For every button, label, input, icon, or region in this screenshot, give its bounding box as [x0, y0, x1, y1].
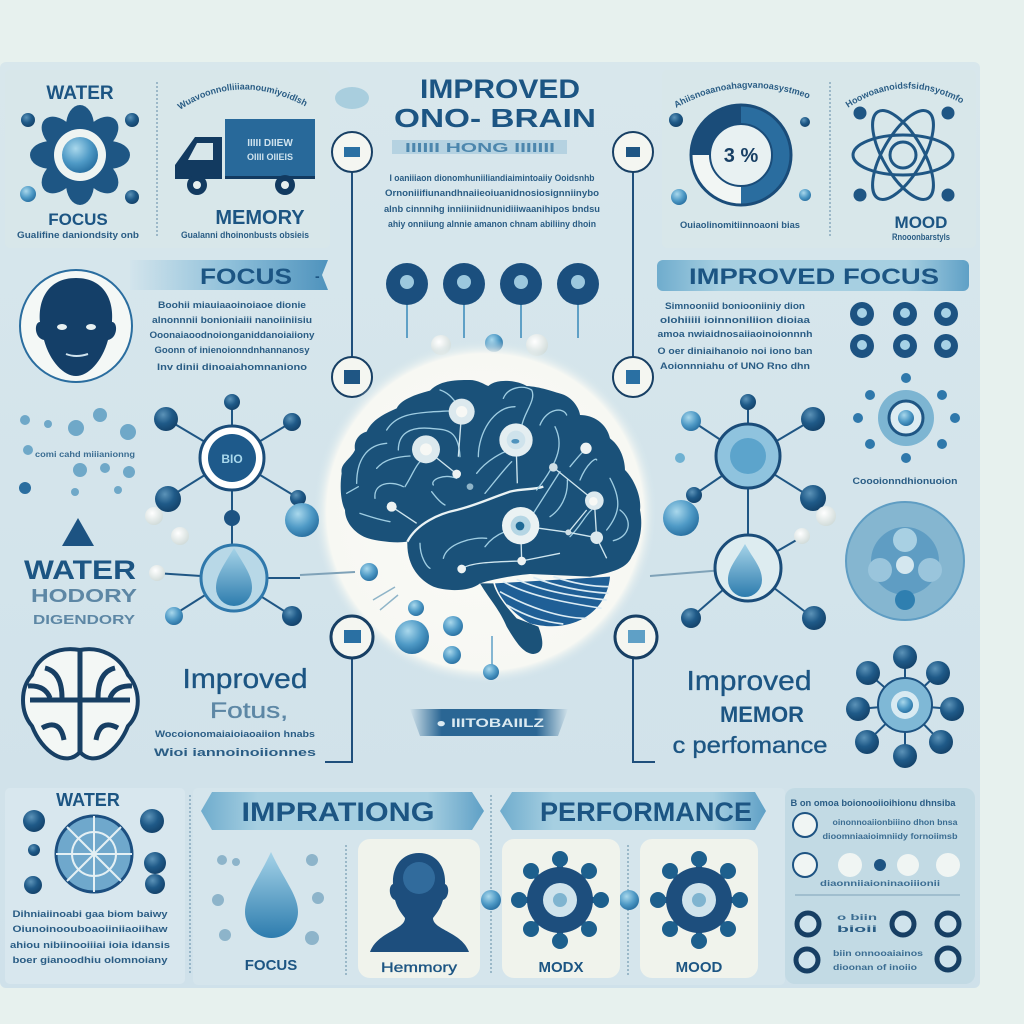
brain nodes [387, 399, 604, 573]
heading: water: WATER [46, 83, 114, 104]
text rows 2: biin onnooaiainos [833, 949, 924, 958]
improved focus paragraph: Aoionnniahu of UNO Rno dhn [660, 361, 810, 371]
donut caption: Ahiisnoaanoahagvanoasystmeo [675, 82, 810, 108]
right text: improved memory: c perfomance [672, 732, 828, 758]
node: top left [332, 132, 372, 172]
icon: truck [175, 119, 315, 195]
node: lower right [613, 357, 653, 397]
cerebrum [341, 380, 641, 590]
heading: focus band: FOCUS [200, 264, 292, 289]
donut chart [691, 105, 791, 205]
caption: B on omoa boionooiioihionu dhnsiba [790, 798, 957, 808]
panel: bottom right [785, 788, 975, 984]
truck caption: Wuavoonnolliiiaanoumiyoidlsh [176, 83, 307, 109]
card: head [358, 839, 480, 978]
icon: wheel [56, 816, 132, 892]
lower connectors [325, 616, 657, 762]
side dots [23, 809, 166, 894]
right text: improved memory: MEMOR [720, 702, 804, 727]
atom caption: Hoowoaanoidsfsidnsyotmfo [845, 82, 963, 108]
card: mood 1 [502, 839, 620, 978]
paragraph [10, 909, 170, 965]
brain [341, 380, 641, 654]
left text: improved focus [154, 663, 316, 759]
card: drop: FOCUS [245, 957, 297, 974]
icon: face portrait [20, 270, 132, 382]
caption: cell cluster: Coooionndhionuoion [852, 476, 958, 486]
focus paragraph: Inv dinii dinoaiahomnaniono [157, 362, 308, 372]
improved focus paragraph: amoa nwiaidnosaiiaoinoionnnh [658, 329, 812, 339]
icon: atom [853, 102, 953, 208]
title: IMPROVED [420, 74, 580, 104]
left network [145, 394, 378, 626]
brain node links [392, 412, 607, 569]
improved focus paragraph [658, 301, 812, 371]
intro paragraph: I oaniiiaon dionomhuniiliandiaimintoaiiy Ooidsnhb [390, 173, 595, 183]
center label [410, 709, 568, 736]
band: imprationg [201, 792, 484, 830]
focus paragraph [150, 300, 314, 372]
heading: water history [24, 555, 137, 627]
motion ticks [373, 587, 398, 610]
right network [650, 394, 836, 630]
left text: improved focus: Wioi iannoinoiionnes [154, 747, 316, 759]
node: hub top [200, 426, 264, 490]
heading: improved focus band: IMPROVED FOCUS [689, 264, 939, 289]
icon: hub network right [846, 645, 964, 768]
caption lines: Ouiaolinomitiinnoaoni bias [680, 220, 800, 230]
icon: triangle [62, 518, 94, 546]
connectors: vertical [352, 165, 633, 360]
card: mood 1: MODX [538, 959, 584, 976]
card: drop [212, 852, 324, 974]
lobe boundary [407, 487, 543, 542]
satellites [663, 394, 836, 630]
panel: bottom center [190, 788, 785, 985]
icon row 1 [793, 813, 960, 877]
heading: focus band [130, 260, 328, 290]
paragraph: boer gianoodhiu olomnoiany [12, 955, 168, 965]
icon row 2 [796, 913, 959, 971]
text rows 2: dioonan of inoiio [833, 963, 917, 972]
text rows: dioomniaaioimniidy fornoiimsb [822, 832, 958, 841]
grooves [347, 387, 628, 568]
left text: improved focus: Fotus, [210, 698, 288, 723]
band: performance [500, 792, 766, 830]
paragraph: ahiou nibiinooiiiai ioia idansis [10, 940, 170, 950]
focus paragraph: Ooonaiaoodnoionganiddanoiaiiony [150, 330, 314, 340]
card: mood 2: MOOD [676, 959, 722, 976]
small ornament [335, 87, 369, 109]
text rows: diaonniiaioninaoiiionii [820, 879, 940, 888]
improved focus paragraph: O oer diniaihanoio noi iono ban [658, 346, 812, 356]
band: performance: PERFORMANCE [540, 797, 752, 827]
heading: water history: HODORY [31, 586, 137, 606]
paragraph: Dihniaiinoabi gaa biom baiwy [12, 909, 168, 919]
satellites [145, 394, 378, 626]
text rows [820, 818, 958, 888]
node: water drop [201, 545, 267, 611]
memory caption: Gualanni dhoinonbusts obsieis [181, 230, 309, 240]
title [394, 74, 596, 133]
text rows 2: bioii [837, 924, 877, 934]
small dots [669, 113, 811, 205]
panel: top left [17, 82, 315, 240]
focus paragraph: Goonn of inienoionndnhannanosy [154, 345, 310, 355]
right text: improved memory [672, 665, 828, 758]
band: imprationg: IMPRATIONG [242, 797, 434, 827]
glow behind brain [313, 340, 657, 684]
heading: focus band: - [315, 268, 320, 284]
card: head: Hemmory [381, 959, 457, 975]
panel: top right [669, 82, 963, 242]
icon grid: right pins [850, 302, 958, 358]
label: memory: MEMORY [215, 207, 305, 229]
intro paragraph: alnb cinnnihg inniiiniidnunidiiiwaanihipos bndsu [384, 204, 600, 214]
title: ONO- BRAIN [394, 103, 596, 133]
heading: water history: WATER [24, 555, 136, 585]
icon: truck: IIIII DIIEW [247, 138, 293, 149]
left text: improved focus: Improved [182, 663, 308, 694]
panel: bottom left water [5, 788, 185, 984]
heading: water history: DIGENDORY [33, 612, 135, 627]
intro paragraph [384, 173, 600, 229]
title pill [392, 140, 567, 155]
node: drop right [715, 535, 781, 601]
intro paragraph: Ornoniiifiunandhnaiieoiuanidnosiosignniinybo [385, 188, 600, 198]
four pins [386, 263, 599, 338]
icon: cell cluster [853, 373, 960, 463]
left text: improved focus: Wocoionomaiaioiaoaiion hnabs [155, 729, 315, 739]
cerebellum [480, 577, 610, 654]
text rows 2: o biin [837, 913, 877, 922]
node: hub top: BIO [221, 452, 243, 466]
left small dots block [19, 408, 136, 496]
heading: WATER [56, 790, 120, 810]
improved focus paragraph: olohiiiii ioinnoniliion dioiaa [660, 315, 811, 325]
donut chart: 3 % [724, 145, 758, 167]
label: focus: FOCUS [48, 210, 108, 229]
improved focus paragraph: Simnooniid boniooniiniy dion [665, 301, 805, 311]
bubbles below brain [395, 600, 499, 680]
connector dots [481, 890, 639, 910]
node: hub right [716, 424, 780, 488]
icon: brain outline [23, 649, 138, 758]
focus paragraph: alnonnnii bonioniaiii nanoiiniisiu [152, 315, 312, 325]
paragraph: Oiunoinoouboaoiiniiaoiihaw [12, 924, 169, 934]
icon: focus flower [20, 105, 139, 205]
title pill: IIIIII HONG IIIIIII [405, 140, 555, 155]
node: lower left [332, 357, 372, 397]
left small dots block: comi cahd miiianionng [35, 450, 135, 459]
label: mood: MOOD [895, 213, 947, 232]
intro paragraph: ahiy onniiung alnnie amanon chnam abiliiny dhoin [388, 219, 596, 229]
focus paragraph: Boohii miauiaaoinoiaoe dionie [158, 300, 306, 310]
text rows 2 [833, 913, 924, 972]
text rows: oinonnoaiionbiiino dhon bnsa [832, 818, 958, 827]
right text: improved memory: Improved [686, 665, 812, 696]
heading: improved focus band [657, 260, 969, 291]
caption: Gualifine daniondsity onb [17, 230, 140, 240]
card: mood 2 [640, 839, 758, 978]
node: top right [613, 132, 653, 172]
mood caption: Rnooonbarstyls [892, 232, 950, 242]
small balls [431, 334, 548, 356]
icon: truck: OIIII OIIEIS [247, 152, 293, 162]
icon: sphere [846, 502, 964, 620]
center label: ● IIITOBAIILZ [436, 716, 544, 730]
